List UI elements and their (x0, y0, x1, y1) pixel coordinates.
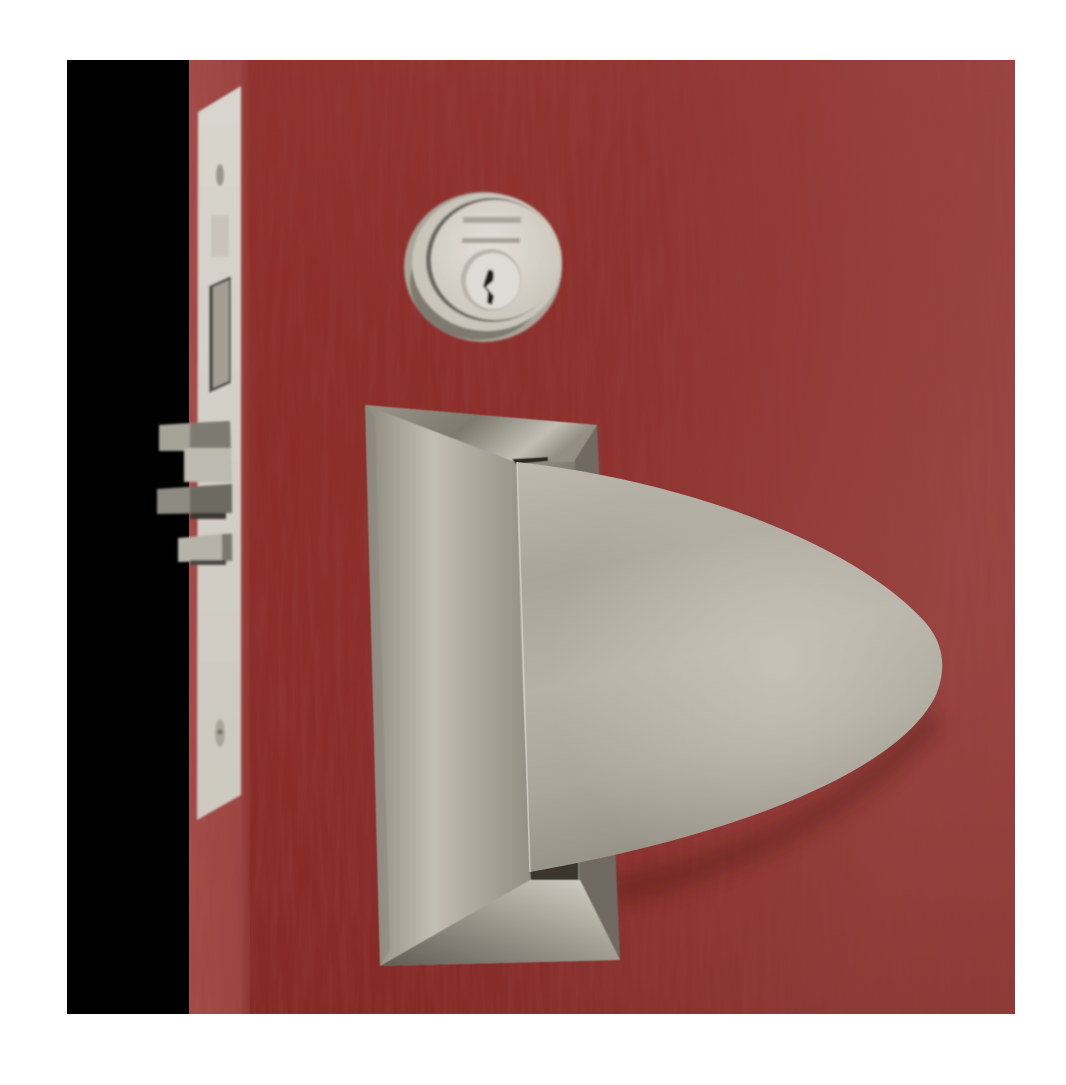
upper latch (159, 421, 231, 451)
top facet (365, 405, 597, 462)
paddle lever (517, 462, 942, 872)
cylinder lettering (463, 217, 521, 223)
door edge (189, 60, 252, 1014)
key cylinder (404, 192, 562, 342)
lower screw (215, 719, 225, 747)
door rose plate (365, 405, 620, 966)
key plug (461, 249, 521, 311)
left edge shade (365, 405, 390, 966)
middle latch (157, 484, 232, 514)
lever left edge highlight (517, 462, 530, 872)
right facet (575, 425, 620, 960)
door face (189, 60, 1015, 1014)
lower lever gap shadow (530, 862, 578, 880)
mortise faceplate (197, 86, 241, 820)
black background behind door (67, 60, 189, 1014)
bottom facet (380, 880, 620, 966)
keyway (483, 270, 494, 305)
upper screw (216, 164, 224, 186)
latch bolts (157, 421, 233, 565)
latch slot (209, 276, 231, 393)
shadow under lever (590, 700, 940, 905)
upper latch block (184, 448, 232, 482)
lower latch (178, 533, 233, 562)
upper lever gap shadow (512, 457, 548, 464)
engraved marks (211, 215, 229, 257)
